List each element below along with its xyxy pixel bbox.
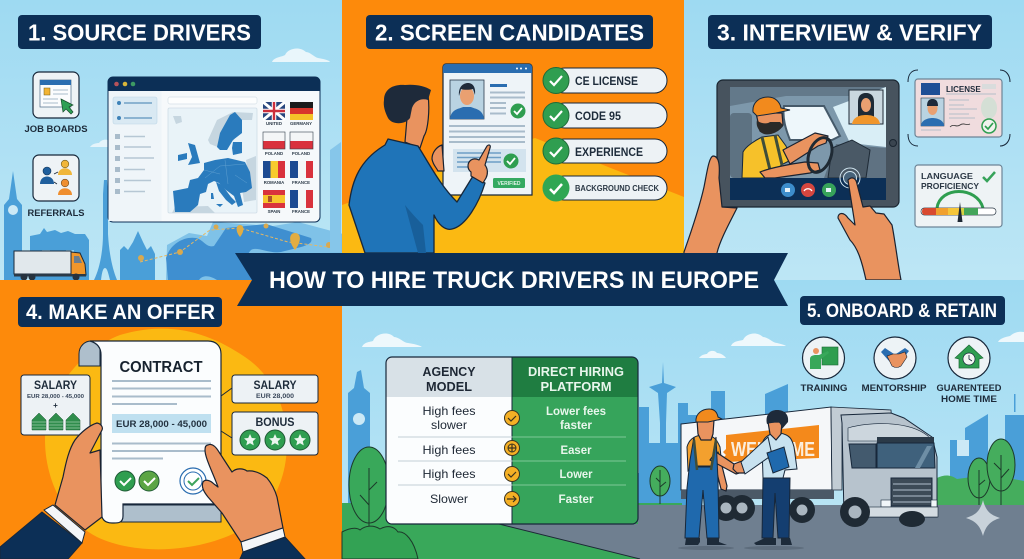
- call control bar: [730, 168, 886, 200]
- right hand pointing with suit sleeve: [202, 444, 305, 559]
- icon: mentorship: [874, 337, 916, 379]
- welcome sign: WELCOME: [731, 439, 815, 461]
- right hand tapping tablet: [838, 178, 901, 280]
- column: agency model: High fees: [422, 467, 476, 481]
- column: agency model: MODEL: [426, 379, 472, 394]
- left hand holding tablet: [684, 156, 737, 280]
- column: agency model: [422, 364, 476, 506]
- salary range highlight: [112, 414, 211, 433]
- contract document: [79, 341, 221, 523]
- candidate profile document: VERIFIED: [497, 181, 521, 187]
- card: salary: SALARY: [254, 380, 297, 392]
- title banner: HOW TO HIRE TRUCK DRIVERS IN EUROPE: [269, 267, 759, 294]
- steering wheel: [804, 134, 836, 176]
- trailer: [681, 407, 832, 490]
- column: agency model: Slower: [430, 492, 468, 506]
- checklist pills: [542, 68, 667, 202]
- icon: referrals: [33, 155, 79, 201]
- card: salary: EUR 28,000: [256, 394, 295, 400]
- person reviewing document: [349, 85, 490, 253]
- city skyline: [348, 362, 1024, 505]
- dashboard: [828, 140, 870, 178]
- card: bonus: [232, 412, 318, 455]
- search bar: [168, 97, 257, 104]
- heading: 1 source drivers: 1. SOURCE DRIVERS: [28, 20, 251, 46]
- benefit labels: [800, 383, 1002, 405]
- flags: country list: [263, 102, 313, 214]
- flags: country list: SPAIN: [268, 209, 280, 214]
- map: Europe: [168, 108, 257, 213]
- yellow sunburst backdrop: [45, 329, 287, 549]
- flags: country list: FRANCE: [292, 180, 310, 185]
- skyline: European landmarks: [4, 171, 155, 280]
- column: direct hiring platform: DIRECT HIRING: [528, 364, 624, 379]
- truck with welcome trailer: [681, 407, 938, 527]
- card: salary with stacks: [21, 375, 90, 435]
- icon: training: [802, 337, 844, 379]
- heading: 5 onboard and retain: [800, 296, 1005, 325]
- panel: 1 source drivers: [0, 0, 343, 280]
- sparkle mark: [966, 500, 1000, 536]
- column: direct hiring platform: Lower: [560, 467, 593, 481]
- card: salary with stacks: +: [53, 401, 58, 410]
- flags: country list: FRANCE: [292, 209, 310, 214]
- column: agency model: High fees: [422, 404, 476, 418]
- road: [499, 505, 1024, 559]
- comparison badges: [504, 410, 520, 506]
- column: direct hiring platform: Lower fees: [546, 404, 606, 418]
- benefit labels: MENTORSHIP: [862, 383, 927, 394]
- benefit labels: TRAINING: [800, 383, 848, 394]
- label: referrals: REFERRALS: [28, 208, 84, 219]
- heading: 2 screen candidates: 2. SCREEN CANDIDATES: [375, 20, 644, 46]
- check item: code 95: CODE 95: [575, 111, 622, 123]
- cab: [841, 413, 937, 517]
- cloud: [272, 48, 330, 62]
- heading: 5 onboard and retain: 5. ONBOARD & RETAIN: [807, 301, 997, 322]
- panel: 5 onboard and retain: [342, 280, 1024, 559]
- column: direct hiring platform: PLATFORM: [540, 379, 612, 394]
- panel: 2 screen candidates: [342, 0, 684, 280]
- candidate photo: [450, 80, 484, 119]
- driver: [742, 97, 828, 178]
- column: direct hiring platform: faster: [560, 418, 592, 432]
- heading: 4 make an offer: 4. MAKE AN OFFER: [26, 301, 215, 324]
- flags: country list: UNITED: [266, 121, 282, 126]
- trees and bushes: [342, 439, 1015, 559]
- license card: [908, 70, 1010, 146]
- worker in overalls: [678, 409, 740, 550]
- check item: CE license: CE LICENSE: [575, 76, 638, 88]
- flags: country list: POLAND: [292, 151, 310, 156]
- column: direct hiring platform: Easer: [560, 443, 592, 457]
- language proficiency card: [915, 165, 1002, 227]
- candidate profile document: [443, 64, 532, 195]
- connectors: [221, 388, 232, 438]
- contract document: CONTRACT: [120, 359, 203, 376]
- clouds: [362, 332, 1024, 358]
- benefit labels: HOME TIME: [941, 394, 997, 405]
- column: direct hiring platform: [528, 364, 624, 506]
- card: salary: [232, 375, 318, 403]
- card: salary with stacks: EUR 28,000 - 45,000: [27, 394, 84, 400]
- icon: job boards: [33, 72, 79, 118]
- label: job boards: JOB BOARDS: [24, 124, 88, 135]
- license card: LICENSE: [946, 85, 981, 94]
- language proficiency card: PROFICIENCY: [921, 181, 979, 191]
- salary range highlight: EUR 28,000 - 45,000: [116, 419, 207, 430]
- flags: country list: ROMANIA: [264, 180, 284, 185]
- truck: [14, 251, 86, 280]
- map: Europe route: [138, 222, 343, 280]
- welcome sign: [723, 425, 819, 462]
- sidebar menu: [108, 91, 162, 221]
- card: salary with stacks: SALARY: [34, 380, 77, 392]
- panel: 4 make an offer: [0, 280, 342, 559]
- column: agency model: AGENCY: [422, 364, 476, 379]
- caller picture-in-picture: [849, 90, 883, 124]
- card: bonus: BONUS: [256, 417, 295, 429]
- grass: [342, 503, 682, 559]
- flags: country list: POLAND: [265, 151, 283, 156]
- left hand with suit sleeve: [0, 423, 102, 559]
- check item: experience: EXPERIENCE: [575, 147, 643, 159]
- wheels: [713, 495, 925, 527]
- flags: country list: GERMANY: [290, 121, 312, 126]
- tablet video call: [717, 80, 899, 207]
- panel: 3 interview and verify: [684, 0, 1024, 280]
- benefit labels: GUARENTEED: [936, 383, 1002, 394]
- browser window with Europe map: [108, 77, 320, 222]
- column: agency model: High fees: [422, 443, 476, 457]
- building: right edge: [330, 142, 341, 252]
- cloud: small: [90, 140, 110, 147]
- manager with folder: [733, 410, 804, 550]
- column: direct hiring platform: Faster: [558, 492, 594, 506]
- icon: home time: [948, 337, 990, 379]
- title banner: [235, 253, 788, 306]
- language proficiency card: LANGUAGE: [921, 171, 973, 181]
- column: agency model: slower: [431, 418, 467, 432]
- check item: background check: BACKGROUND CHECK: [575, 184, 659, 193]
- comparison table: [386, 357, 638, 524]
- heading: 3 interview and verify: 3. INTERVIEW & VERIFY: [717, 20, 982, 46]
